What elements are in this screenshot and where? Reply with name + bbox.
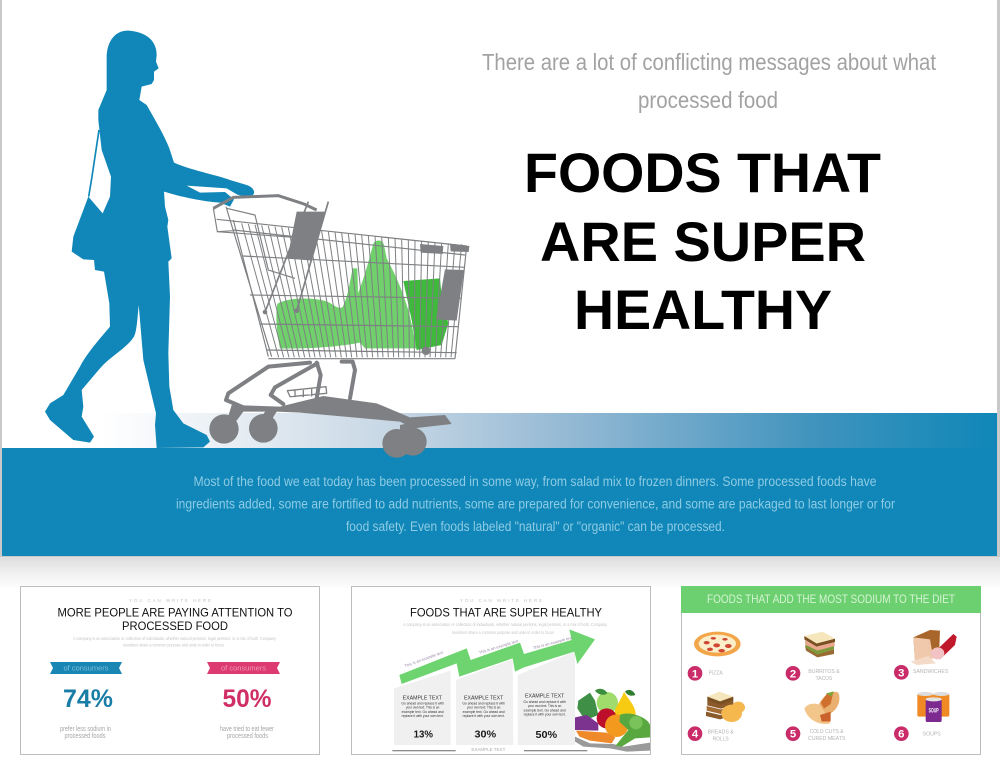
card text: Go ahead and replace it with (523, 700, 566, 704)
number badge 5: 5 (790, 729, 796, 741)
thumbnail heading: FOODS THAT ARE SUPER HEALTHY (410, 606, 602, 620)
thumbnail description (73, 636, 276, 648)
thumbnail description: members share a common purpose and unite in order to focus (452, 630, 554, 636)
card text: example text. Go ahead and (524, 708, 566, 712)
arrow labels: This is an example text (478, 638, 519, 655)
card text: replace it with your own text. (402, 714, 444, 718)
thumbnail heading (58, 606, 292, 633)
cart panels (263, 212, 469, 355)
body text: Most of the food we eat today has been processed in some way, from salad mix to frozen dinners. Some processed foods have (194, 474, 876, 489)
number badge 2 (786, 666, 800, 681)
number badge 1: 1 (692, 668, 698, 680)
labels row 2: COLD CUTS & (810, 729, 844, 735)
arrow labels (404, 635, 574, 668)
title: ARE SUPER (540, 210, 866, 273)
fruit and vegetable plate (575, 689, 650, 752)
card text: example text. Go ahead and (463, 710, 505, 714)
labels row 1: TACOS (816, 676, 833, 682)
number badge 4: 4 (692, 729, 699, 741)
thumbnail description (403, 622, 607, 636)
card text: EXAMPLE TEXT (525, 694, 565, 700)
floor gradient band (100, 413, 997, 448)
thumbnail description: A company is an association or collection of individuals, whether natural persons, legal persons, or a mix of both. Company (403, 622, 607, 628)
cart wire basket (213, 196, 467, 359)
card text: Go ahead and replace it with (462, 701, 505, 705)
card text: example text. Go ahead and (402, 710, 444, 714)
icon: sandwich (804, 632, 835, 657)
cart chassis (226, 362, 355, 407)
intro text: There are a lot of conflicting messages about what (482, 49, 937, 75)
card text: your own text. This is an (406, 706, 440, 710)
icon: pizza (694, 632, 741, 656)
labels row 1 (709, 669, 949, 682)
icon: soup cans: SOUP (929, 707, 939, 714)
stat caption left: processed foods (64, 733, 106, 740)
body text: ingredients added, some are fortified to add nutrients, some are prepared for convenience, and some are packaged to last longer or for (176, 496, 895, 512)
panel: sodium foods thumbnail (681, 586, 981, 754)
timeline footer: EXAMPLE TEXT (471, 747, 506, 752)
card text (401, 694, 566, 718)
labels row 2: ROLLS (713, 737, 729, 743)
labels row 2: SOUPS (923, 732, 941, 738)
number badge 6 (894, 726, 909, 741)
shopping cart (209, 196, 469, 458)
green zigzag arrow (399, 629, 595, 684)
arrow labels: This is an example text (532, 635, 574, 650)
thumbnail description: A company is an association or collection of individuals, whether natural persons, legal persons, or a mix of both. Company (73, 636, 276, 642)
number badge 3 (894, 665, 909, 680)
card text: your own text. This is an (528, 704, 562, 708)
stat caption left (60, 726, 111, 740)
card percentages: 30% (474, 729, 496, 740)
icon: breads and rolls (706, 692, 745, 722)
number badge 3: 3 (898, 667, 904, 679)
number badge 6: 6 (898, 729, 904, 741)
stat 74%: 74% (63, 685, 113, 713)
labels row 2: BREADS & (708, 730, 734, 736)
card percentages (414, 729, 557, 741)
eyebrow: YOU CAN WRITE HERE (129, 598, 211, 603)
thumbnail heading: MORE PEOPLE ARE PAYING ATTENTION TO (58, 606, 292, 620)
number badge 5 (786, 726, 800, 741)
arrow labels: This is an example text (404, 649, 444, 668)
title: HEALTHY (574, 278, 832, 341)
title (524, 141, 881, 341)
intro text: processed food (638, 87, 778, 113)
stat caption right: have tried to eat fewer (220, 726, 275, 733)
icon: soup cans (917, 692, 949, 722)
number badge 4 (688, 726, 702, 741)
card percentages: 50% (535, 730, 557, 741)
thumbnail heading: PROCESSED FOOD (122, 619, 228, 633)
card text: your own text. This is an (467, 706, 501, 710)
stat caption right: processed foods (227, 733, 268, 740)
panel: consumers thumbnail (20, 586, 320, 754)
number badge 2: 2 (790, 668, 796, 680)
labels row 2: CURED MEATS (808, 736, 846, 742)
labels row 1: PIZZA (709, 670, 723, 676)
panel: main slide (0, 0, 1000, 557)
body text (176, 474, 895, 534)
icon: burrito (804, 691, 839, 724)
stat caption right (220, 726, 275, 740)
blue footer band (2, 448, 997, 556)
groceries (276, 241, 448, 350)
stat caption left: prefer less sodium in (60, 726, 111, 733)
info cards (394, 652, 575, 745)
woman silhouette (45, 31, 254, 448)
labels row 1: BURRITOS & (808, 669, 840, 675)
eyebrow: YOU CAN WRITE HERE (460, 598, 542, 603)
number badge 1 (688, 666, 702, 681)
icon: cold cuts (911, 630, 957, 665)
intro text (482, 49, 937, 113)
ribbon: pink (207, 662, 280, 674)
ribbon: blue (50, 662, 122, 674)
card text: EXAMPLE TEXT (403, 695, 442, 701)
labels row 2 (708, 729, 941, 743)
stat 50%: 50% (222, 685, 272, 713)
title: FOODS THAT (524, 141, 881, 204)
panel: healthy foods thumbnail (352, 586, 650, 754)
green header: FOODS THAT ADD THE MOST SODIUM TO THE DIET (707, 592, 956, 606)
card percentages: 13% (414, 730, 433, 741)
card text: Go ahead and replace it with (401, 701, 444, 705)
body text: food safety. Even foods labeled "natural" or "organic" can be processed. (346, 519, 725, 534)
thumbnail description: members share a common purpose and unite in order to focus (123, 642, 224, 648)
card text: EXAMPLE TEXT (464, 695, 504, 701)
cart base and wheels (209, 396, 452, 458)
ribbon: blue: of consumers (64, 666, 109, 672)
green header (681, 586, 981, 613)
card text: replace it with your own text. (463, 714, 505, 718)
ribbon: pink: of consumers (221, 666, 267, 672)
card text: replace it with your own text. (524, 712, 566, 716)
labels row 1: SANDWICHES (913, 669, 949, 675)
